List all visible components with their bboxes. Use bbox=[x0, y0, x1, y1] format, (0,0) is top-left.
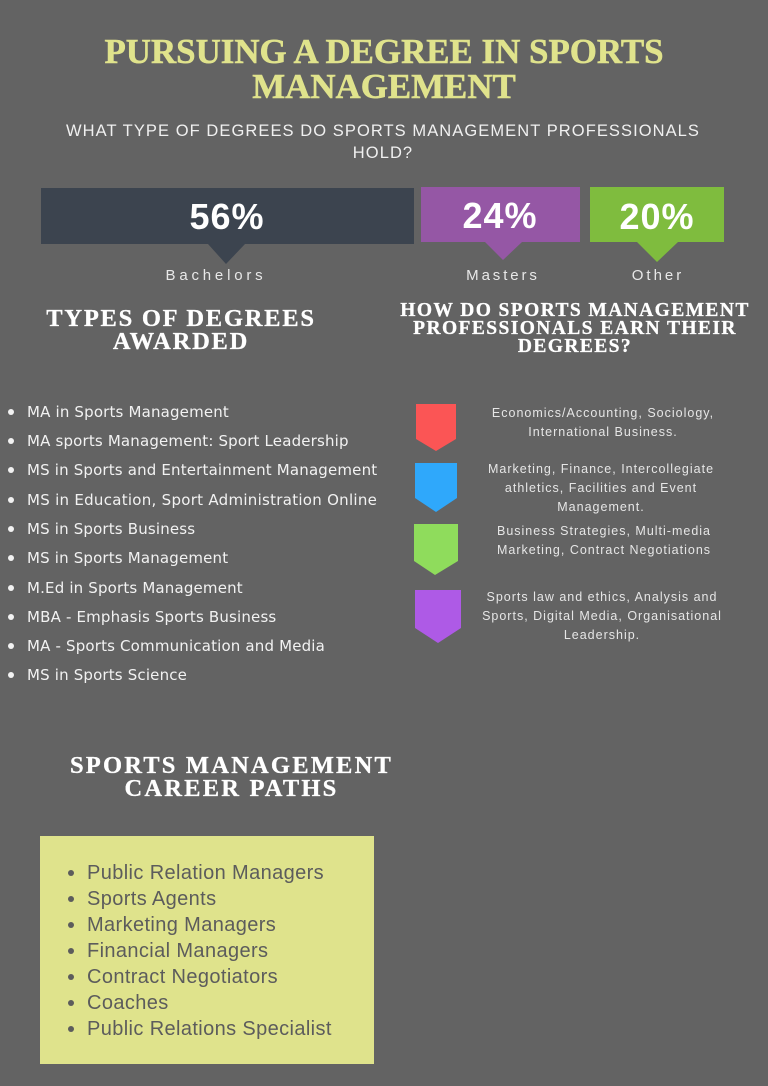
bar: masters 24%: 24% bbox=[462, 195, 538, 236]
heading: career paths bbox=[70, 752, 393, 802]
label: bachelors: Bachelors bbox=[166, 267, 266, 284]
text: blue item: Management. bbox=[557, 500, 645, 514]
icon: red pennant bbox=[416, 404, 456, 451]
heading: how degrees earned: HOW DO SPORTS MANAGEMENT bbox=[400, 300, 750, 321]
list: types of degrees: MA sports Management: Sport Leadership bbox=[27, 432, 349, 450]
label: other: Other bbox=[632, 267, 684, 284]
list: types of degrees: MBA - Emphasis Sports Business bbox=[27, 608, 276, 626]
text: red item bbox=[492, 406, 714, 439]
subtitle: WHAT TYPE OF DEGREES DO SPORTS MANAGEMENT PROFESSIONALS bbox=[66, 122, 700, 140]
degree share chart bbox=[41, 187, 724, 264]
panel: career paths: Public Relations Specialist bbox=[87, 1018, 332, 1040]
panel: career paths: Public Relation Managers bbox=[87, 862, 324, 884]
list: types of degrees bbox=[8, 403, 377, 684]
heading: career paths: SPORTS MANAGEMENT bbox=[70, 752, 393, 779]
text: purple item: Sports law and ethics, Analysis and bbox=[487, 590, 717, 604]
heading: how degrees earned bbox=[400, 300, 750, 357]
list: types of degrees: MS in Sports Science bbox=[27, 666, 187, 684]
panel: career paths: Financial Managers bbox=[87, 940, 268, 962]
panel: career paths: Contract Negotiators bbox=[87, 966, 278, 988]
bar: other 20%: 20% bbox=[619, 196, 695, 237]
list: types of degrees: MS in Sports and Entertainment Management bbox=[27, 461, 377, 479]
bar: other 20% bbox=[590, 187, 724, 262]
title bbox=[104, 32, 664, 106]
panel: career paths: Sports Agents bbox=[87, 888, 216, 910]
text: green item: Marketing, Contract Negotiations bbox=[497, 543, 711, 557]
icon: blue pennant bbox=[415, 463, 457, 512]
bar: masters 24% bbox=[421, 187, 580, 260]
heading: types of degrees: AWARDED bbox=[113, 328, 249, 355]
text: green item bbox=[497, 524, 711, 557]
text: purple item: Sports, Digital Media, Organisational bbox=[482, 609, 722, 623]
text: green item: Business Strategies, Multi-media bbox=[497, 524, 711, 538]
list: types of degrees: MS in Education, Sport Administration Online bbox=[27, 491, 377, 509]
list: types of degrees: MA in Sports Management bbox=[27, 403, 229, 421]
heading: how degrees earned: DEGREES? bbox=[518, 336, 632, 357]
text: blue item: athletics, Facilities and Event bbox=[505, 481, 697, 495]
list: types of degrees: MA - Sports Communication and Media bbox=[27, 637, 325, 655]
title: MANAGEMENT bbox=[252, 67, 516, 106]
icon: purple pennant bbox=[415, 590, 461, 643]
list: types of degrees: MS in Sports Management bbox=[27, 549, 228, 567]
icon: green pennant bbox=[414, 524, 458, 575]
text: blue item bbox=[488, 462, 714, 514]
text: purple item: Leadership. bbox=[564, 628, 640, 642]
heading: types of degrees bbox=[46, 305, 316, 355]
subtitle: HOLD? bbox=[353, 144, 413, 162]
bar: bachelors 56%: 56% bbox=[189, 196, 265, 237]
panel: career paths bbox=[40, 836, 374, 1064]
list: types of degrees: MS in Sports Business bbox=[27, 520, 195, 538]
heading: career paths: CAREER PATHS bbox=[124, 775, 339, 802]
bar: bachelors 56% bbox=[41, 188, 414, 264]
text: red item: International Business. bbox=[528, 425, 678, 439]
heading: how degrees earned: PROFESSIONALS EARN THEIR bbox=[413, 318, 737, 339]
list: types of degrees: M.Ed in Sports Management bbox=[27, 579, 243, 597]
panel: career paths: Marketing Managers bbox=[87, 914, 276, 936]
text: purple item bbox=[482, 590, 722, 642]
subtitle bbox=[66, 122, 700, 162]
text: red item: Economics/Accounting, Sociology, bbox=[492, 406, 714, 420]
label: masters: Masters bbox=[466, 267, 540, 284]
heading: types of degrees: TYPES OF DEGREES bbox=[46, 305, 316, 332]
text: blue item: Marketing, Finance, Intercollegiate bbox=[488, 462, 714, 476]
title: PURSUING A DEGREE IN SPORTS bbox=[104, 32, 664, 70]
panel: career paths: Coaches bbox=[87, 992, 169, 1014]
